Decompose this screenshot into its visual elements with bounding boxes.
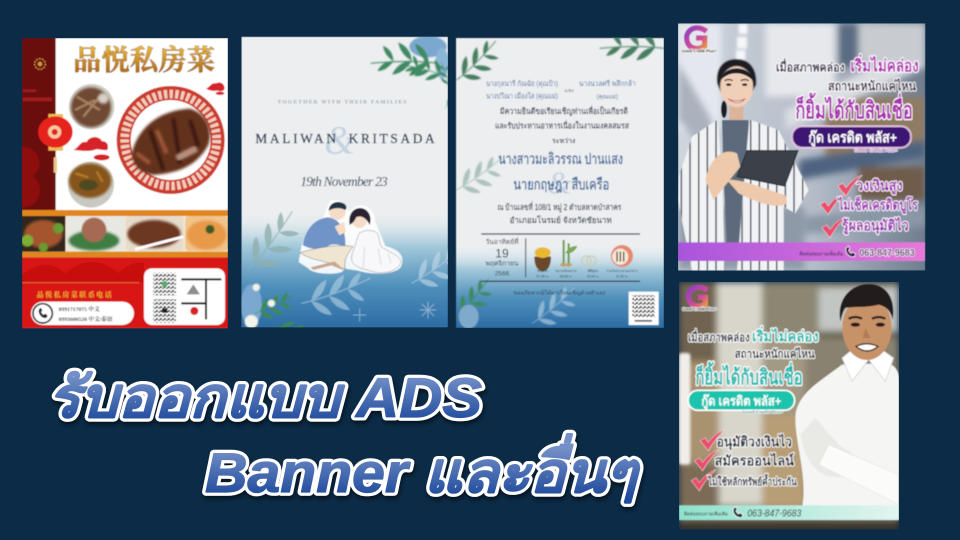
closing line: ขออภัยหากมิได้มาเรียนเชิญด้วยตัวเอง [513,288,606,296]
contact heading: 品悦私房菜联系电话 [37,290,113,299]
heading outline line 2: Banner และอื่นๆ [205,433,640,504]
ampersand: & [324,117,355,162]
headline: เริ่มไม่คล่อง [850,53,919,75]
benefits checklist [820,175,918,238]
heading line 1: รับออกแบบ ADS [48,366,482,429]
brand pill [688,390,795,414]
benefits checklist: รู้ผลอนุมัติไว [842,217,909,236]
flyer title: 品悦私房菜 [73,43,215,76]
leaves left and bottom [241,210,465,327]
contact band: 063-847-9683 [747,509,802,520]
date and schedule [481,234,640,281]
white coat at left edge [679,353,690,465]
dark red side strip [22,38,56,211]
red contact footer [22,257,228,328]
headline: สถานะหนักแค่ไหน [735,346,815,361]
benefits checklist [691,430,797,491]
schedule labels: 09.09 น. [560,274,572,278]
schedule labels: พิธีสู่ขอ [588,268,598,273]
food photo strip [21,210,228,257]
watercolor wash bottom [456,252,664,328]
headline [688,325,819,390]
parents names: (คุณแม่) [597,93,618,100]
benefits checklist: สมัครออนไลน์ [715,452,794,469]
QR and map card [144,268,225,325]
brand pill: กู๊ด เครดิต พลัส+ [808,129,897,148]
date block: 19 [495,246,509,260]
tablet [737,151,798,186]
heading outline line 1: รับออกแบบ ADS [48,366,482,429]
invitation text: ระหว่าง [552,138,575,145]
logo: Good Credit Plus+ [682,306,717,311]
blurred warehouse background [678,23,925,271]
panel: Good Credit Plus ad with businesswoman [678,23,925,271]
schedule labels: ขบวนขันหมาก [555,269,577,273]
floral top right [370,36,448,109]
couple names Thai [498,151,623,193]
couple names Thai: นางสาวมะลิวรรณ ปานแสง [498,151,623,168]
businesswoman [678,59,809,271]
schedule labels: 11.00 น. [616,274,628,278]
panel: Good Credit Plus ad with chef [679,282,899,533]
main dish plate [117,86,225,194]
ampersand: & [547,164,572,200]
headline [776,53,919,125]
contact band: ติดต่อสอบถามเพิ่มเติม [684,510,728,517]
brand pill [792,126,911,154]
couple names [255,133,436,144]
brand pill: Good Credit Plus+ [854,148,898,154]
benefits checklist: อนุมัติวงเงินไว [717,432,792,450]
date block: วันอาทิตย์ที่ [485,237,519,246]
floral bottom left [241,282,305,328]
parents names: นางกุลนารี กัณฉัย (คุณป้า) [486,79,558,88]
logo [682,28,717,54]
contact band [679,505,899,520]
couple names Thai: นายกฤษฎา สืบเครือ [513,175,609,193]
schedule labels: ร่วมรับประทานอาหาร [606,269,638,273]
schedule labels: 07.09 น. [536,274,549,278]
logo: Good Credit Plus+ [682,49,717,54]
contact band: 063-847-9683 [859,248,915,259]
heading small: TOGETHER WITH THEIR FAMILIES [278,99,406,105]
brand pill: Good Credit Plus+ [742,409,783,414]
schedule labels [536,268,638,278]
heading line 2: Banner และอื่นๆ [205,433,640,504]
invitation text: มีความยินดีขอเรียนเชิญท่านเพื่อเป็นเกียรติ [500,105,628,116]
logo [682,287,717,311]
couple illustration [299,200,402,274]
foliage [454,14,664,329]
wedding date: 19th November 23 [300,174,388,189]
headline: สถานะหนักแค่ไหน [828,78,917,94]
phone pill [31,302,134,325]
date block: พฤศจิกายน [486,260,519,268]
small dish bottom [68,162,114,208]
headline: เมื่อสภาพคล่อง [688,328,750,344]
benefits checklist: วงเงินสูง [856,178,903,196]
headline: เมื่อสภาพคล่อง [776,57,845,74]
small dish top [69,84,114,129]
venue [497,201,622,225]
headline: ก็ยิ้มได้กับสินเชื่อ [695,361,803,390]
blurred kitchen background [679,282,899,533]
schedule labels: สงฆ์เช้า [537,269,548,273]
invitation text [495,105,629,145]
panel: wedding invitation cover [241,36,448,328]
brand pill: กู๊ด เครดิต พลัส+ [701,393,782,409]
lantern [38,114,73,173]
parents names: นางนวลศรี พลึกกล้า [579,79,636,88]
couple names: KRITSADA [349,131,435,146]
watercolor wash [241,210,448,327]
schedule icons [534,240,633,271]
contact band [678,242,925,261]
parents names: นางปวีณา เมืองใส (คุณแม่) [486,91,558,100]
stars [353,302,436,322]
panel: Chinese restaurant flyer [5,38,228,328]
date block [485,237,519,277]
QR code [629,292,659,325]
parents names: และ [565,88,574,94]
venue: ณ บ้านเลขที่ 108/1 หมู่ 2 ตำบลหาดป่าสาคร [497,201,622,213]
benefits checklist: ไม่ใช้หลักทรัพย์ค้ำประกัน [707,473,797,488]
date block: 2566 [495,270,510,277]
main heading [48,366,640,504]
panel: Thai wedding invitation details [454,14,664,329]
schedule labels: 10.09 น. [587,274,599,278]
invitation text: และรับประทานอาหารเนื่องในงานมงคลสมรส [495,119,629,130]
benefits checklist: ไม่เช็คเครดิตบูโร [837,195,918,215]
contact band: ติดต่อสอบถามเพิ่มเติม [799,250,843,258]
phone pill: 0993606520 中文/泰语 [59,315,113,323]
striped jacket [678,119,809,271]
phone pill: 0991717075 中文 [59,305,100,313]
venue: อำเภอมโนรมย์ จังหวัดชัยนาท [510,215,612,225]
couple names: MALIWAN [255,131,336,146]
headline: เริ่มไม่คล่อง [752,325,819,345]
red clouds [73,82,225,160]
parents names [486,79,636,100]
chef [795,284,899,508]
